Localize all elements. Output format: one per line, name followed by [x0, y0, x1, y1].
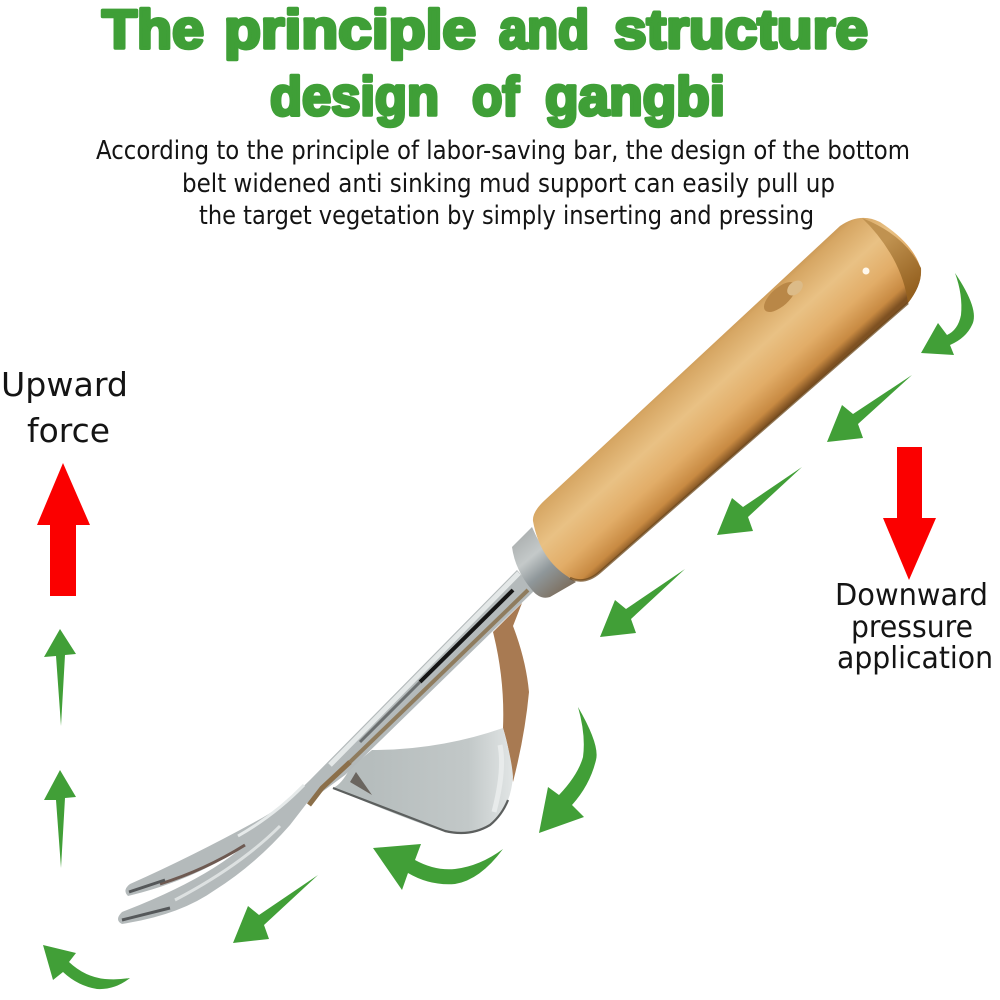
title [102, 0, 868, 127]
green curved arrow right of blade [539, 707, 597, 833]
red downward arrow [883, 447, 936, 580]
title: of [472, 65, 520, 127]
green straight arrow 4 [233, 875, 318, 943]
tool rod and forked tines [118, 570, 535, 924]
label: upward force [1, 365, 128, 450]
green curved arrow bottom left [43, 945, 130, 989]
green straight arrow 3 [600, 569, 685, 637]
green upward arrow lower [44, 770, 76, 868]
tool: hand weeder with wooden handle [118, 218, 921, 924]
label: downward pressure application [835, 578, 993, 676]
tool blade support [333, 603, 529, 834]
green curved arrow top right [921, 273, 974, 355]
description text block [96, 136, 910, 231]
green straight arrow 1 [827, 375, 912, 442]
green straight arrow 2 [717, 467, 802, 535]
tool metal ferrule [512, 527, 576, 598]
tool wooden handle [533, 218, 921, 580]
description text block: belt widened anti sinking mud support can easily pull up [182, 169, 835, 199]
description text block: According to the principle of labor-saving bar, the design of the bottom [96, 136, 910, 166]
title: design [270, 65, 439, 127]
title: gangbi [545, 65, 725, 127]
label: downward pressure application: application [837, 641, 993, 676]
label: upward force: Upward [1, 365, 128, 404]
green upward arrow upper [44, 629, 76, 726]
label: downward pressure application: Downward [835, 578, 988, 613]
label: downward pressure application: pressure [851, 610, 973, 645]
red upward arrow [37, 463, 90, 596]
green curved arrow under blade [373, 844, 503, 890]
label: upward force: force [27, 411, 110, 450]
description text block: the target vegetation by simply inserting and pressing [199, 201, 814, 231]
